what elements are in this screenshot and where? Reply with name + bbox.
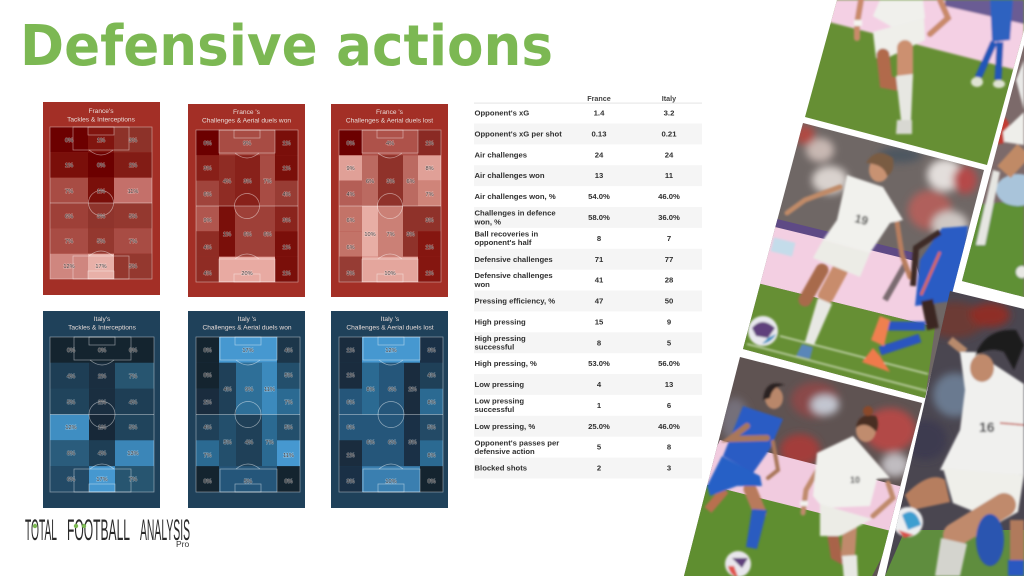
table: defensive statistics: 13 bbox=[595, 171, 603, 180]
heat map: Italy duels won: 0% bbox=[203, 373, 212, 379]
heading: Italy duels lost: Challenges & Aerial duels lost bbox=[346, 324, 434, 332]
table: defensive statistics: Air challenges bbox=[474, 150, 527, 159]
heat map: Italy duels lost: 0% bbox=[427, 479, 436, 485]
table: defensive statistics: 41 bbox=[595, 276, 604, 285]
table: defensive statistics: 56.0% bbox=[658, 359, 680, 368]
photo: Italy player running, top bbox=[800, 0, 1024, 170]
heat map: France duels won: 3% bbox=[282, 218, 291, 224]
heat map: Italy duels won: 9% bbox=[245, 387, 253, 393]
heat map: France duels won: 3% bbox=[203, 166, 212, 172]
heat map: France duels lost: 0% bbox=[346, 141, 355, 147]
table: defensive statistics: Pressing efficiency, % bbox=[474, 296, 555, 306]
heat map: Italy duels won: 7% bbox=[284, 400, 293, 406]
table: defensive statistics: Air challenges won, % bbox=[474, 192, 556, 201]
heat map: France duels won: 9% bbox=[203, 218, 212, 224]
heat map: Italy tackles: 5% bbox=[129, 425, 137, 431]
panel: Italy tackles and interceptions bbox=[43, 311, 160, 508]
heat map: Italy duels lost: 3% bbox=[427, 348, 436, 354]
heat map: Italy duels lost: 1% bbox=[346, 348, 355, 354]
table: defensive statistics: 46.0% bbox=[658, 192, 680, 201]
heading: France tackles: France's bbox=[88, 108, 114, 115]
heat map: Italy duels won: 5% bbox=[284, 373, 293, 379]
heat map: France duels won: 4% bbox=[282, 192, 291, 198]
heat map: Italy tackles: 5% bbox=[67, 400, 75, 406]
heat map: Italy duels won: 11% bbox=[264, 387, 275, 393]
heat map: France tackles: 0% bbox=[65, 138, 73, 144]
table: defensive statistics: High pressing bbox=[474, 334, 526, 343]
heat map: France duels won: 0% bbox=[203, 141, 212, 147]
heat map: Italy duels lost: 1% bbox=[346, 453, 355, 459]
heat map: France tackles: 1% bbox=[65, 163, 73, 169]
heat map: Italy duels won: 0% bbox=[203, 479, 212, 485]
table: defensive statistics: 3 bbox=[667, 464, 671, 473]
heat map: France duels lost: 1% bbox=[425, 141, 434, 147]
table: defensive statistics: 2 bbox=[597, 464, 601, 473]
heat map: France duels lost: 6% bbox=[406, 179, 415, 185]
heat map: France duels won: 1% bbox=[282, 166, 291, 172]
photo: Italy number 19 with ball: 19 bbox=[853, 211, 870, 228]
heat map: Italy duels lost: 8% bbox=[427, 453, 436, 459]
table: defensive statistics: 71 bbox=[595, 255, 604, 264]
heat map: Italy duels lost: 8% bbox=[366, 387, 375, 393]
table: defensive statistics: 24 bbox=[665, 150, 674, 159]
heat map: Italy tackles: 7% bbox=[129, 374, 137, 380]
heat map: France duels lost: 3% bbox=[346, 271, 355, 277]
heat map: Italy duels won: 5% bbox=[244, 479, 252, 485]
heat map: France tackles: 5% bbox=[97, 239, 105, 245]
table: defensive statistics: 3.2 bbox=[664, 109, 674, 118]
table: defensive statistics: opponent's half bbox=[474, 238, 532, 247]
heat map: Italy duels lost: 3% bbox=[408, 440, 417, 446]
table header: Italy bbox=[662, 94, 676, 103]
photo: France and Italy players running: 10 bbox=[850, 475, 860, 485]
heat map: France duels won: 1% bbox=[223, 232, 231, 238]
heat map: France duels lost: 6% bbox=[346, 245, 355, 251]
table: defensive statistics: Low pressing, % bbox=[474, 422, 535, 431]
heat map: France duels lost: 9% bbox=[346, 166, 355, 172]
heat map: France duels won: 1% bbox=[282, 271, 291, 277]
table: defensive statistics: Opponent's xG per shot bbox=[474, 130, 562, 138]
table: defensive statistics: 47 bbox=[595, 296, 603, 306]
table: defensive statistics: High pressing, % bbox=[474, 359, 537, 368]
heat map: France duels won: 9% bbox=[243, 141, 251, 147]
table: defensive statistics: 7 bbox=[667, 234, 671, 243]
table: defensive statistics: 5 bbox=[667, 338, 672, 347]
heat map: France duels won: 6% bbox=[203, 192, 212, 198]
heat map: Italy duels lost: 12% bbox=[385, 348, 397, 354]
heat map: Italy duels won: 4% bbox=[203, 425, 212, 431]
heat map: France duels lost: 4% bbox=[346, 192, 355, 198]
heat map: Italy duels won: 2% bbox=[203, 400, 212, 406]
heat map: France tackles: 3% bbox=[97, 214, 105, 220]
heat map: France duels won: 6% bbox=[243, 232, 252, 238]
heat map: France tackles: 11% bbox=[128, 189, 138, 195]
table: defensive statistics: 5 bbox=[597, 443, 602, 452]
panel: France tackles and interceptions bbox=[43, 102, 160, 295]
heat map: Italy duels lost: 6% bbox=[366, 440, 375, 446]
heat map: France duels lost: 1% bbox=[425, 245, 434, 251]
heat map: France tackles: 1% bbox=[97, 138, 105, 144]
heat map: France tackles: 6% bbox=[65, 214, 73, 220]
table: defensive statistics: 1 bbox=[597, 401, 602, 410]
heat map: Italy tackles: 8% bbox=[67, 451, 75, 457]
table: defensive statistics: Defensive challenges bbox=[474, 255, 553, 264]
heading: France tackles: Tackles & Interceptions bbox=[67, 116, 136, 124]
heading: Italy duels lost: Italy 's bbox=[381, 316, 399, 323]
heat map: Italy duels lost: 6% bbox=[346, 400, 355, 406]
heat map: France duels won: 4% bbox=[203, 245, 212, 251]
heat map: France tackles: 0% bbox=[97, 163, 105, 169]
table: defensive statistics: 24 bbox=[595, 150, 604, 159]
table: defensive statistics: 0.13 bbox=[592, 130, 606, 138]
heading: Italy tackles: Tackles & Interceptions bbox=[68, 324, 137, 332]
heat map: Italy tackles: 4% bbox=[67, 374, 75, 380]
photo: cropped player, right middle bbox=[962, 45, 1024, 297]
table: defensive statistics: 58.0% bbox=[588, 213, 610, 222]
heat map: France tackles: 5% bbox=[129, 264, 137, 270]
table: defensive statistics: 8 bbox=[667, 443, 672, 452]
logo: Total Football Analysis Pro bbox=[25, 514, 190, 549]
panel: France challenges and aerial duels lost bbox=[331, 104, 448, 297]
heat map: Italy duels lost bbox=[339, 337, 443, 492]
heat map: France duels won: 1% bbox=[282, 245, 291, 251]
heat map: Italy duels lost: 3% bbox=[346, 479, 355, 485]
table: defensive statistics: 13 bbox=[665, 380, 673, 389]
panel: France challenges and aerial duels won bbox=[188, 104, 305, 297]
panel: Italy challenges and aerial duels won bbox=[188, 311, 305, 508]
heat map: France tackles: 3% bbox=[129, 138, 137, 144]
heat map: France duels lost: 10% bbox=[364, 232, 376, 238]
heat map: Italy duels won: 4% bbox=[284, 348, 293, 354]
heat map: Italy tackles: 1% bbox=[98, 425, 106, 431]
heat map: Italy duels lost: 6% bbox=[388, 440, 396, 446]
heat map: France tackles: 7% bbox=[65, 189, 73, 195]
heat map: Italy tackles: 13% bbox=[127, 451, 139, 457]
heat map: France duels won: 7% bbox=[263, 179, 272, 185]
heat map: France duels won: 4% bbox=[203, 271, 212, 277]
heat map: Italy duels lost: 8% bbox=[427, 400, 436, 406]
heat map: Italy tackles: 0% bbox=[129, 348, 137, 354]
table: defensive statistics: Air challenges won bbox=[474, 171, 545, 180]
table: defensive statistics: defensive action bbox=[474, 447, 535, 456]
heat map: France duels lost: 6% bbox=[366, 179, 374, 185]
heat map: Italy tackles: 2% bbox=[98, 374, 106, 380]
heat map: France duels won: 6% bbox=[263, 232, 272, 238]
table: defensive statistics: 36.0% bbox=[658, 213, 680, 222]
heading: Italy duels won: Challenges & Aerial duels won bbox=[202, 324, 292, 332]
heading: Italy duels won: Italy 's bbox=[238, 316, 256, 323]
table: defensive statistics: Low pressing bbox=[474, 396, 524, 406]
photo: Italy number 16 close-up bbox=[880, 288, 1024, 576]
table: defensive statistics: 54.0% bbox=[588, 192, 610, 201]
heat map: France tackles: 1% bbox=[97, 189, 105, 195]
heat map: France duels lost: 3% bbox=[406, 232, 415, 238]
heading: France duels won: Challenges & Aerial duels won bbox=[202, 118, 291, 124]
heading: Italy tackles: Italy's bbox=[94, 316, 110, 323]
heading: France duels won: France 's bbox=[233, 109, 260, 116]
heat map: France tackles bbox=[50, 127, 152, 279]
table: defensive statistics: Blocked shots bbox=[474, 464, 527, 473]
table: defensive statistics: successful bbox=[474, 343, 514, 352]
table: defensive statistics: High pressing bbox=[474, 317, 526, 326]
heat map: Italy duels won: 7% bbox=[265, 440, 274, 446]
heat map: France tackles: 5% bbox=[129, 214, 137, 220]
heat map: Italy tackles: 17% bbox=[96, 477, 108, 483]
heat map: Italy duels lost: 1% bbox=[346, 373, 355, 379]
heat map: Italy duels lost: 6% bbox=[346, 425, 355, 431]
logo: Total Football Analysis Pro: TOTAL bbox=[25, 514, 57, 547]
table: defensive statistics: won, % bbox=[474, 217, 501, 226]
heat map: France duels lost: 3% bbox=[425, 218, 434, 224]
heat map: France duels won: 20% bbox=[241, 271, 253, 277]
heat map: France duels lost bbox=[339, 130, 441, 282]
table: defensive statistics: 9 bbox=[667, 317, 671, 326]
heat map: Italy duels lost: 4% bbox=[427, 373, 436, 379]
heat map: France duels lost: 1% bbox=[425, 271, 434, 277]
table: defensive statistics: 1.4 bbox=[594, 109, 605, 118]
heat map: Italy tackles: 7% bbox=[129, 477, 137, 483]
heat map: Italy tackles bbox=[50, 337, 154, 492]
heat map: France tackles: 2% bbox=[129, 163, 137, 169]
table: defensive statistics: 50 bbox=[665, 296, 673, 306]
heat map: Italy duels won: 5% bbox=[284, 425, 293, 431]
heat map: Italy tackles: 4% bbox=[129, 400, 137, 406]
heat map: Italy tackles: 0% bbox=[98, 348, 106, 354]
heat map: Italy duels won: 0% bbox=[284, 479, 293, 485]
heat map: Italy duels lost: 2% bbox=[408, 387, 417, 393]
table: defensive statistics: 11 bbox=[665, 171, 674, 180]
heat map: Italy tackles: 6% bbox=[67, 477, 75, 483]
heading: France duels lost: France 's bbox=[376, 109, 403, 116]
table: defensive statistics: 28 bbox=[665, 276, 674, 285]
heat map: France duels lost: 8% bbox=[425, 166, 434, 172]
heat map: Italy tackles: 12% bbox=[65, 425, 77, 431]
heat map: Italy duels won: 4% bbox=[223, 387, 232, 393]
heat map: France duels won: 1% bbox=[282, 141, 291, 147]
table: defensive statistics: won bbox=[474, 280, 490, 289]
table: defensive statistics: 15 bbox=[595, 317, 604, 326]
heat map: Italy duels won: 17% bbox=[242, 348, 254, 354]
table: defensive statistics: 25.0% bbox=[588, 422, 610, 431]
title: Defensive actions bbox=[20, 14, 553, 79]
table: defensive statistics: Opponent's passes per bbox=[474, 438, 559, 447]
heat map: France duels won: 4% bbox=[223, 179, 231, 185]
photo: France and Italy players running bbox=[680, 355, 930, 576]
heat map: France duels won bbox=[196, 130, 298, 282]
table: defensive statistics: Opponent's xG bbox=[474, 109, 529, 118]
logo: Total Football Analysis Pro: FOOTBALL bbox=[67, 514, 130, 547]
heat map: Italy duels lost: 6% bbox=[388, 387, 396, 393]
table header: France bbox=[587, 94, 611, 103]
heat map: France duels lost: 4% bbox=[386, 141, 394, 147]
heading: France duels lost: Challenges & Aerial duels lost bbox=[346, 118, 433, 124]
table: defensive statistics: Low pressing bbox=[474, 380, 524, 389]
heat map: France duels lost: 3% bbox=[386, 179, 395, 185]
heat map: France tackles: 7% bbox=[65, 239, 73, 245]
table: defensive statistics: Challenges in defence bbox=[474, 209, 556, 218]
heat map: France duels lost: 7% bbox=[386, 232, 395, 238]
heat map: Italy duels won bbox=[196, 337, 300, 492]
table header bbox=[474, 94, 702, 104]
heat map: Italy duels lost: 10% bbox=[385, 479, 397, 485]
heat map: France duels lost: 6% bbox=[346, 218, 355, 224]
table: defensive statistics: successful bbox=[474, 405, 514, 414]
table: defensive statistics: 46.0% bbox=[658, 422, 680, 431]
heat map: France duels won: 3% bbox=[243, 179, 252, 185]
table: defensive statistics: 53.0% bbox=[588, 359, 610, 368]
heat map: Italy duels won: 7% bbox=[203, 453, 212, 459]
table: defensive statistics: Defensive challenges bbox=[474, 271, 553, 280]
table: defensive statistics: 0.21 bbox=[662, 130, 677, 138]
table: defensive statistics: 77 bbox=[665, 255, 673, 264]
heat map: Italy duels lost: 5% bbox=[427, 425, 436, 431]
heat map: Italy tackles: 4% bbox=[98, 451, 106, 457]
table: defensive statistics: 6 bbox=[667, 401, 671, 410]
heat map: France tackles: 7% bbox=[129, 239, 137, 245]
heat map: Italy duels won: 4% bbox=[245, 440, 253, 446]
table: defensive statistics bbox=[474, 94, 702, 478]
heat map: Italy tackles: 0% bbox=[67, 348, 75, 354]
table: defensive statistics: 4 bbox=[597, 380, 602, 389]
logo: Total Football Analysis Pro: Pro bbox=[176, 539, 190, 549]
text: ANALYSIS bbox=[140, 514, 190, 547]
panel: Italy challenges and aerial duels lost bbox=[331, 311, 448, 508]
heat map: France duels lost: 7% bbox=[425, 192, 434, 198]
photo: Italy number 19 with ball bbox=[740, 120, 990, 400]
heat map: France tackles: 17% bbox=[95, 264, 107, 270]
heat map: Italy tackles: 2% bbox=[98, 400, 106, 406]
heat map: Italy duels won: 5% bbox=[223, 440, 232, 446]
heat map: France tackles: 12% bbox=[63, 264, 75, 270]
heat map: France duels lost: 10% bbox=[384, 271, 396, 277]
heat map: Italy duels won: 0% bbox=[203, 348, 212, 354]
table: defensive statistics: 8 bbox=[597, 234, 602, 243]
heat map: Italy duels won: 11% bbox=[283, 453, 294, 459]
table: defensive statistics: 8 bbox=[597, 338, 602, 347]
table: defensive statistics: Ball recoveries in bbox=[474, 230, 538, 238]
photo: Italy number 16 close-up: 16 bbox=[979, 419, 995, 435]
